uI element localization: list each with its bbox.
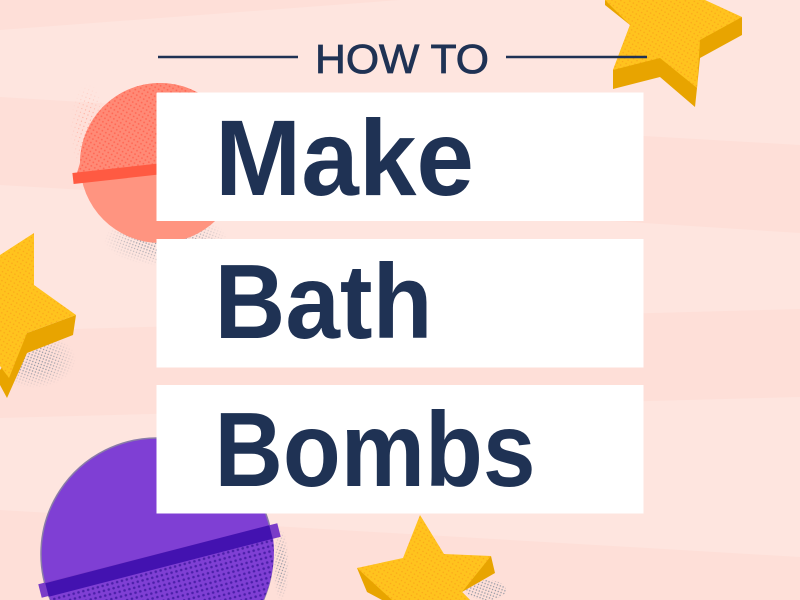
heading: how to: HOW TO (315, 36, 489, 82)
title line: Bath (156, 239, 644, 368)
title line: Make (156, 92, 644, 221)
icon: coral bath bomb (72, 83, 223, 264)
title line: Make: Make (215, 97, 474, 218)
title line: Bombs: Bombs (214, 391, 536, 509)
title line: Bombs (156, 385, 644, 514)
icon: purple bath bomb (40, 438, 289, 600)
icon: left yellow star (0, 233, 76, 398)
icon: top right yellow star (605, 0, 742, 107)
title line: Bath: Bath (214, 243, 432, 361)
icon: bottom yellow star (357, 515, 506, 600)
